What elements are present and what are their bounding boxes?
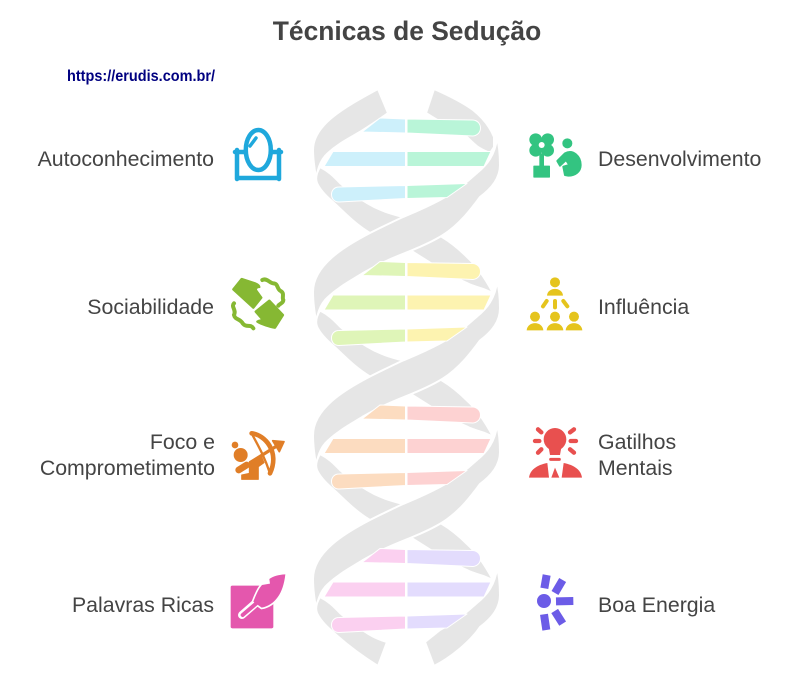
base pairs level 2: lime and yellow — [324, 262, 491, 346]
label: Sociabilidade: Sociabilidade — [87, 295, 214, 319]
label: Foco e Comprometimento: Comprometimento — [40, 456, 215, 480]
label: Boa Energia: Boa Energia — [598, 593, 715, 617]
label: Gatilhos Mentais: Mentais — [598, 456, 673, 480]
label: Desenvolvimento: Desenvolvimento — [598, 147, 761, 171]
label: Gatilhos Mentais: Gatilhos — [598, 430, 676, 454]
icon: energy burst — [537, 575, 573, 630]
icon: flower and person — [529, 133, 581, 178]
label: Foco e Comprometimento: Foco e — [150, 430, 215, 454]
icon: person with lightbulb — [529, 428, 582, 478]
icon: handshake puzzle — [233, 279, 283, 328]
label: Autoconhecimento: Autoconhecimento — [38, 147, 214, 171]
base pairs level 4: pink and lavender — [324, 548, 491, 632]
icon: quill and paper — [231, 574, 285, 628]
title: Técnicas de Sedução — [273, 16, 541, 46]
dna helix strands — [313, 89, 500, 666]
label: Palavras Ricas: Palavras Ricas — [72, 593, 214, 617]
icon: archer — [232, 433, 284, 479]
source url: https://erudis.com.br/ — [67, 68, 215, 85]
label: Influência: Influência — [598, 295, 689, 319]
icon: people pyramid — [527, 277, 582, 330]
base pairs level 1: blue and mint — [324, 118, 491, 202]
base pairs level 3: peach and rose — [324, 405, 491, 489]
icon: mirror — [235, 130, 281, 179]
